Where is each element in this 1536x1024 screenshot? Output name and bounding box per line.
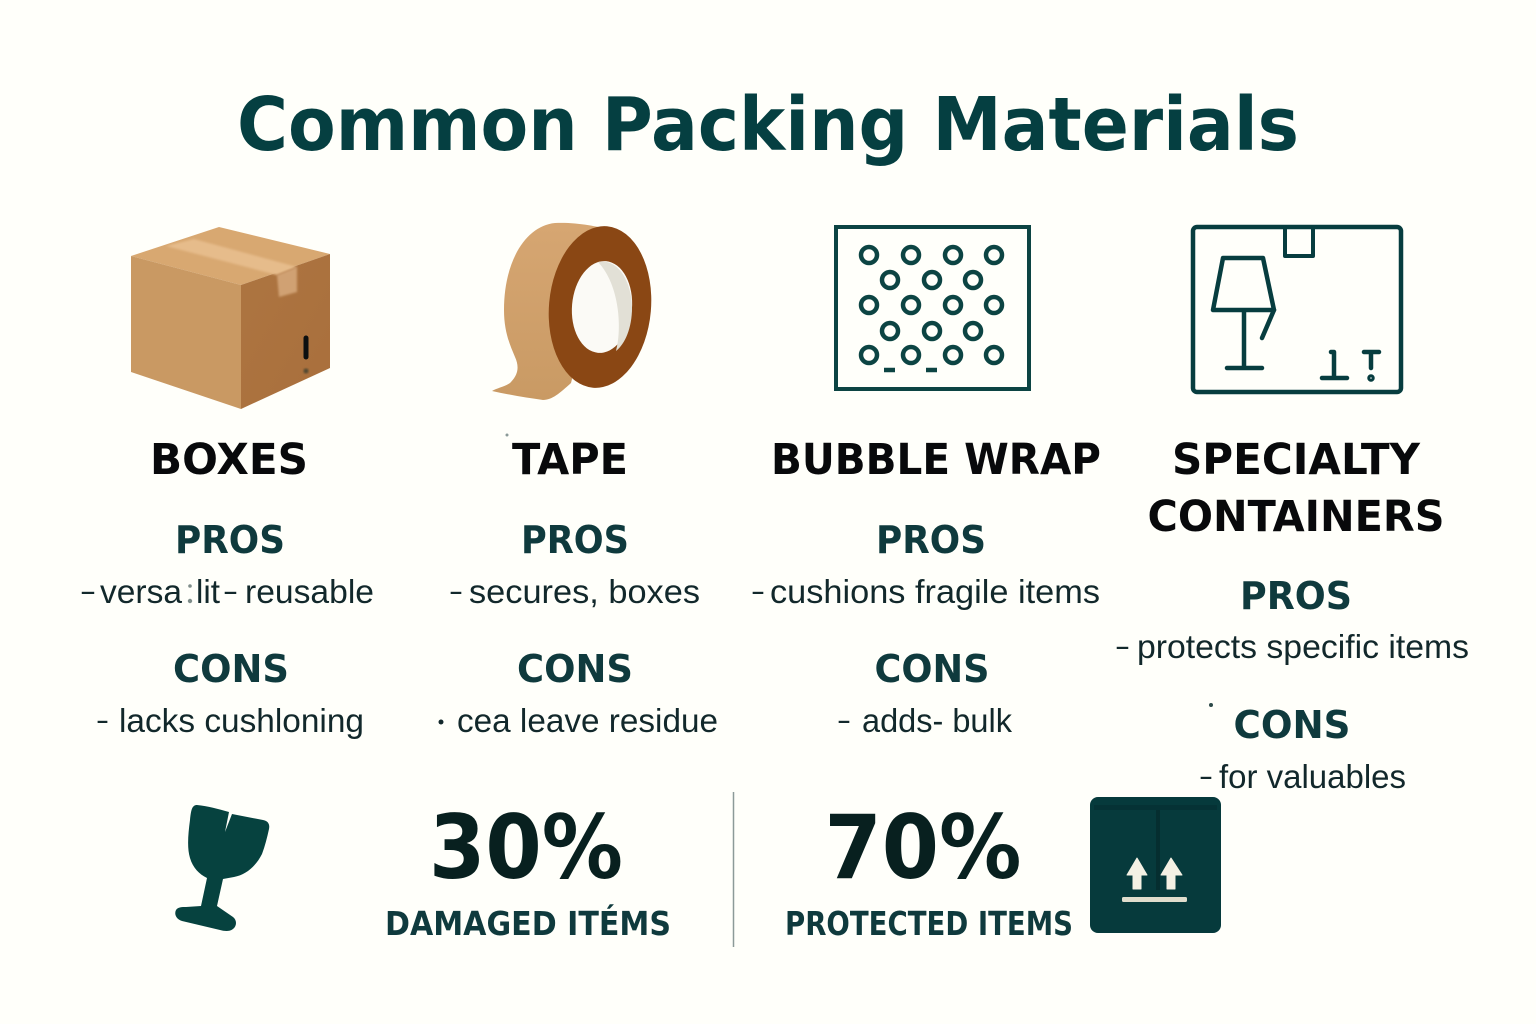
stat: 30% damaged items: [385, 796, 671, 943]
label: damaged items: DAMAGED ITÉMS: [385, 903, 671, 943]
pros text: bubble wrap: –: [752, 579, 764, 604]
heading: bubble wrap: BUBBLE WRAP: [771, 435, 1101, 485]
icon: broken glass: [175, 805, 269, 931]
speck near tape heading: [506, 434, 508, 436]
pros text: boxes: reusable: [245, 573, 374, 610]
pros: specialty containers: PROS: [1240, 574, 1352, 618]
cons: tape: CONS: [517, 647, 633, 691]
column: boxes: [81, 435, 374, 739]
icon: specialty container with lamp: [1193, 227, 1401, 392]
stat: 70% protected items: [785, 796, 1073, 943]
pros text: specialty containers: protects specific items: [1137, 628, 1469, 665]
cons: specialty containers: CONS: [1234, 703, 1350, 747]
column: tape: [438, 435, 718, 739]
pros text: boxes: versa: [100, 573, 183, 610]
heading: boxes: BOXES: [150, 435, 308, 485]
label: protected items: PROTECTED ITEMS: [785, 904, 1073, 943]
pros text: boxes: [81, 573, 374, 610]
number: 30%: 30%: [429, 796, 623, 899]
cons text: bubble wrap: adds- bulk: [862, 702, 1012, 739]
divider: [732, 792, 734, 947]
column: specialty containers: [1116, 435, 1469, 795]
pros text: bubble wrap: cushions fragile items: [770, 573, 1100, 610]
icon: tape roll: [492, 222, 658, 400]
pros text: boxes: –: [81, 579, 95, 604]
pros text: tape: –: [450, 579, 462, 604]
cons text: specialty containers: for valuables: [1219, 758, 1406, 795]
icon: bubble wrap: [836, 227, 1029, 389]
heading line 2: specialty containers: CONTAINERS: [1148, 492, 1444, 542]
icon: protected box with up arrows: [1090, 797, 1221, 933]
speck near cons: [1209, 703, 1213, 707]
pros text: boxes: –: [224, 579, 237, 604]
cons text: boxes: lacks cushloning: [119, 702, 364, 739]
pros: tape: PROS: [521, 518, 629, 562]
column: bubble wrap: [752, 435, 1101, 739]
pros text: tape: secures, boxes: [469, 573, 700, 610]
icon: cardboard box: [131, 227, 330, 409]
heading: specialty containers: SPECIALTY: [1172, 435, 1421, 485]
cons: boxes: CONS: [173, 647, 289, 691]
pros: boxes: PROS: [175, 518, 285, 562]
pros text: specialty containers: –: [1116, 634, 1129, 659]
cons text: bubble wrap: –: [838, 708, 850, 733]
cons text: specialty containers: –: [1200, 764, 1212, 789]
number: 70%: 70%: [824, 796, 1022, 899]
pros text: boxes: lit: [196, 573, 220, 610]
heading: tape: TAPE: [512, 435, 628, 485]
pros: bubble wrap: PROS: [876, 518, 986, 562]
cons text: tape: cea leave residue: [457, 702, 718, 739]
cons: bubble wrap: CONS: [874, 647, 990, 691]
cons text: boxes: –: [97, 708, 108, 733]
title: Common Packing Materials: [237, 82, 1299, 168]
